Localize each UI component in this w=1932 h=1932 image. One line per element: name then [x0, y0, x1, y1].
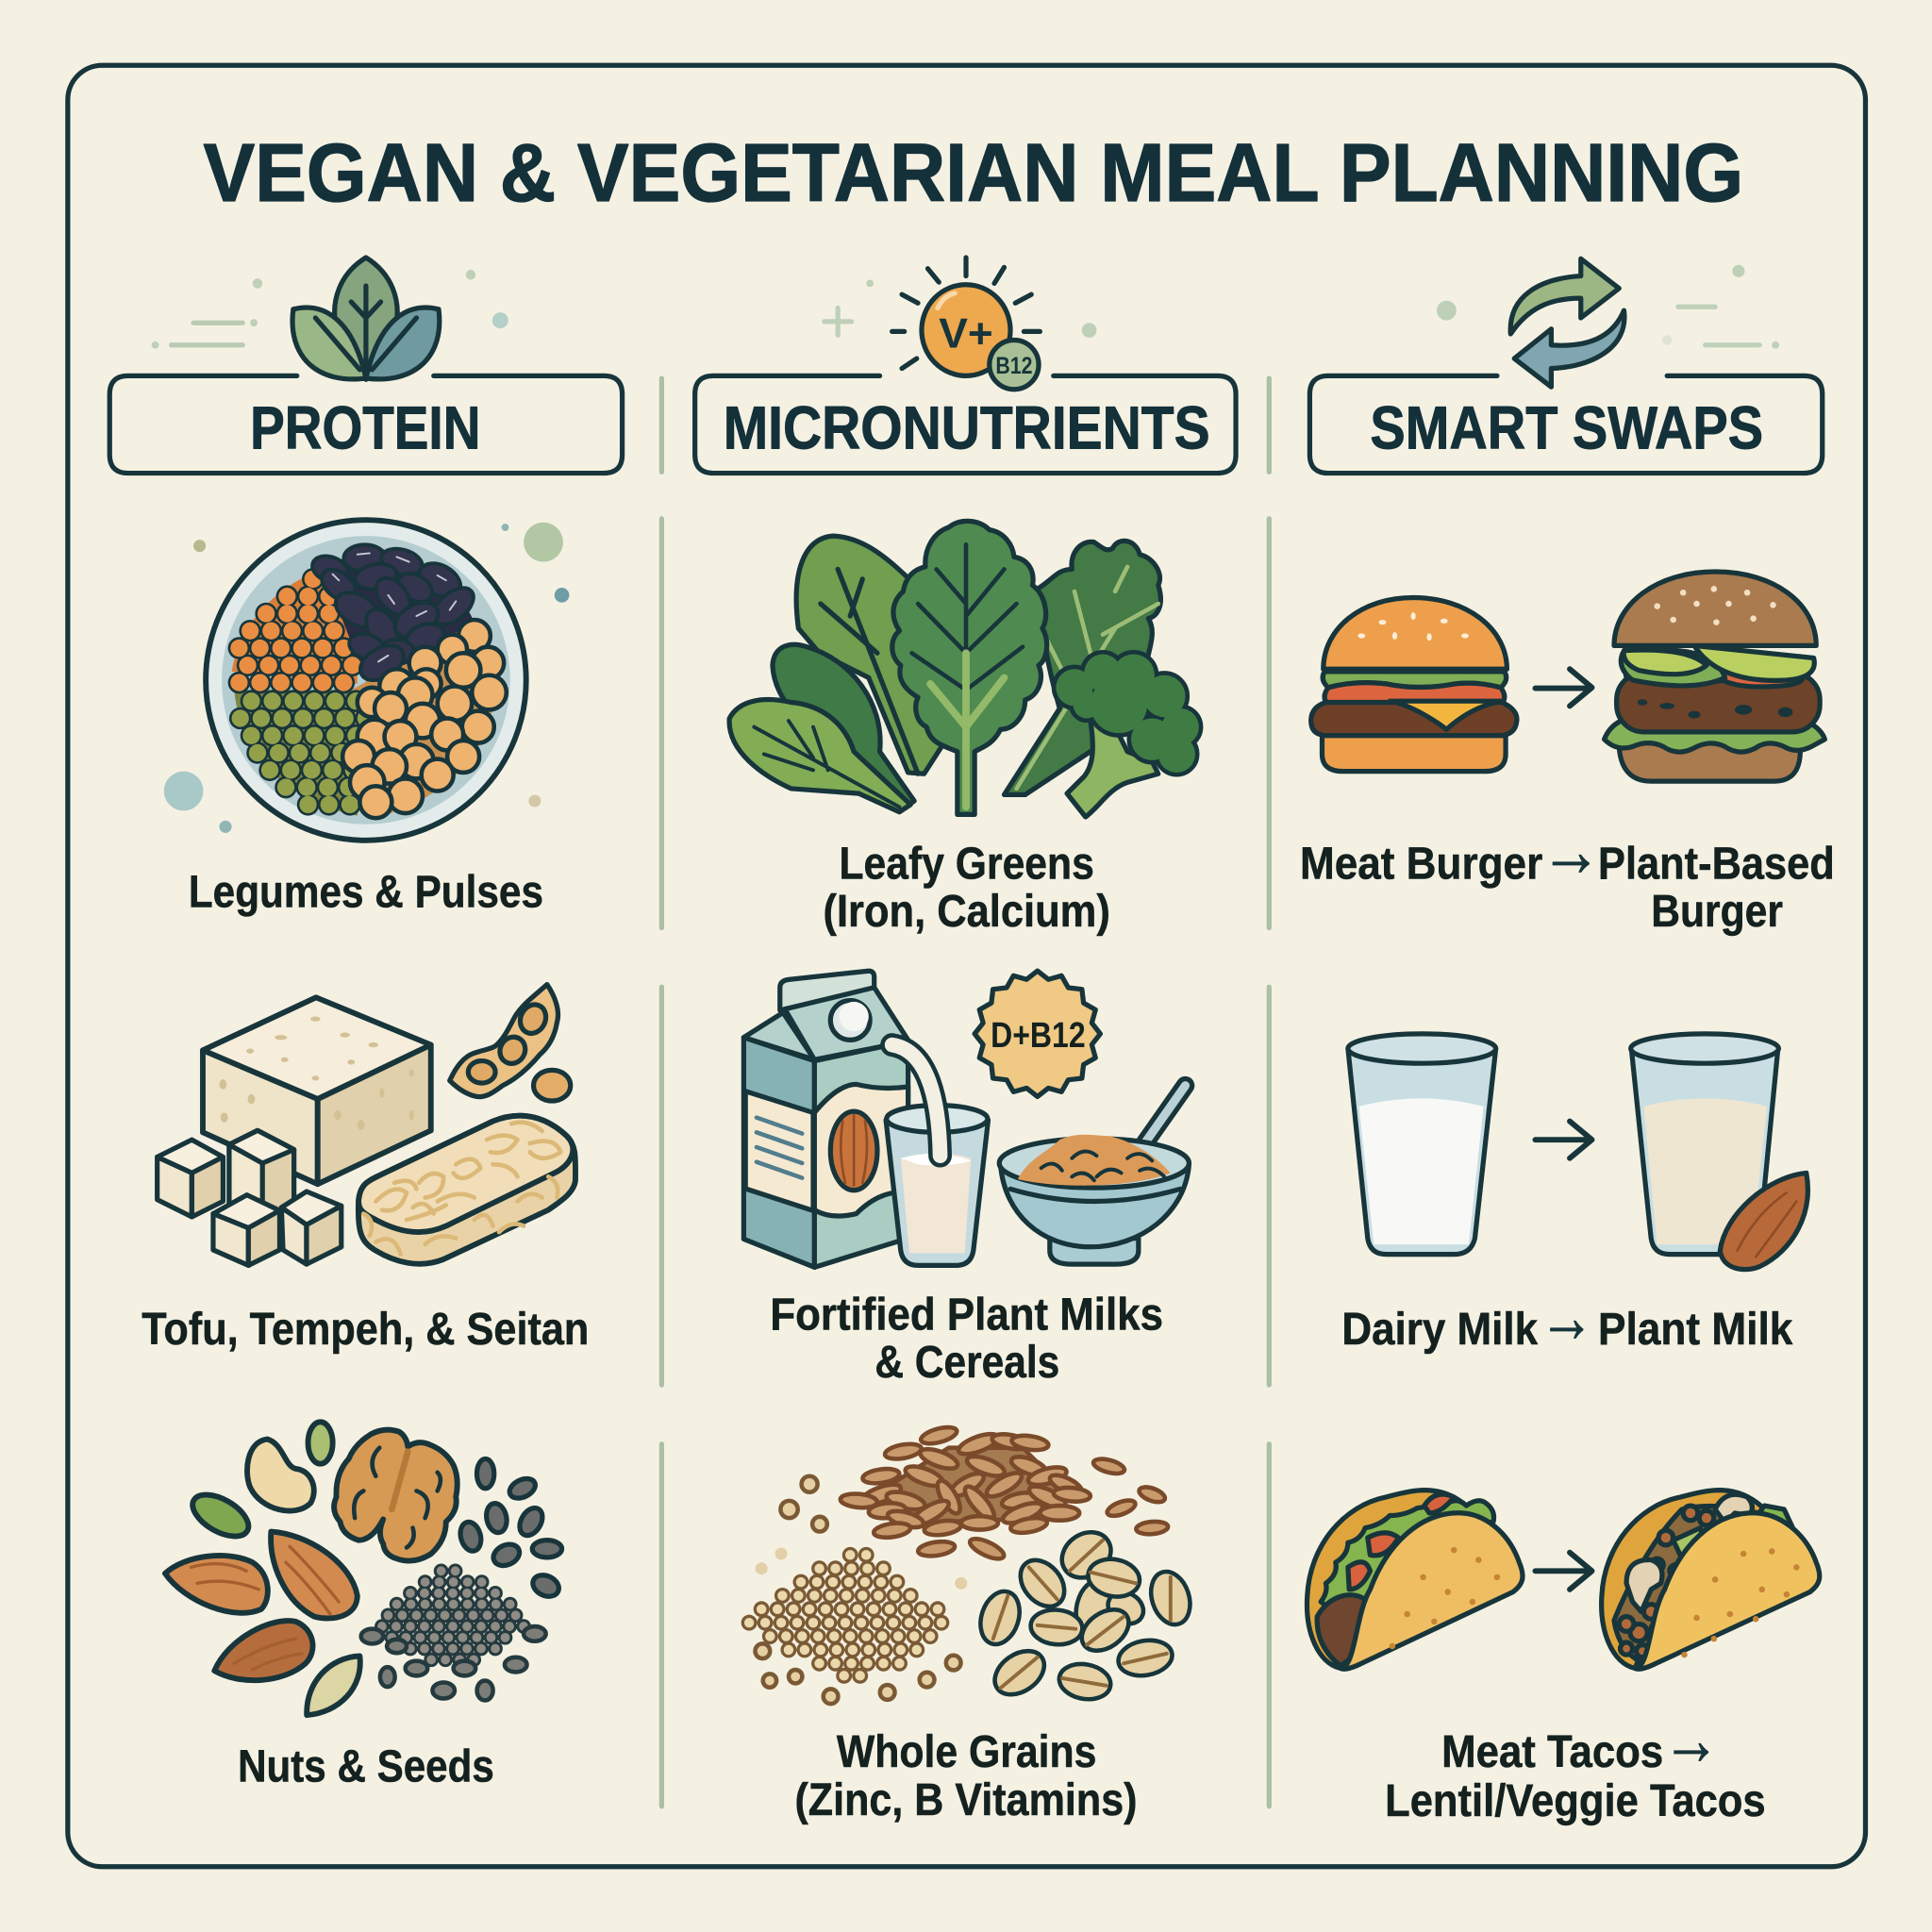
icon: oats — [974, 1523, 1196, 1704]
caption: Meat Tacos — [1441, 1726, 1663, 1777]
caption: Tofu, Tempeh, & Seitan — [142, 1304, 589, 1355]
icon: dark seeds — [458, 1458, 562, 1601]
icon: lentil veggie taco — [1602, 1491, 1820, 1669]
icon: vitamin sun: B12 — [995, 354, 1033, 379]
panel: leafy greens — [729, 521, 1199, 937]
icon: vitamin sun: V+ — [939, 310, 993, 357]
caption — [794, 1726, 1138, 1825]
panel: smart swaps column header: SMART SWAPS — [1370, 393, 1763, 461]
panel: milk swap — [1341, 1034, 1807, 1357]
caption: Dairy Milk — [1341, 1304, 1538, 1355]
icon: quinoa pile — [749, 1476, 967, 1704]
arrow — [1535, 669, 1592, 706]
icon: D+B12 badge: D+B12 — [991, 1016, 1086, 1056]
caption — [823, 838, 1110, 937]
icon: vitamin sun — [892, 258, 1040, 390]
icon: walnut — [334, 1430, 458, 1561]
caption: Fortified Plant Milks — [770, 1289, 1163, 1340]
icon: tempeh slab — [358, 1116, 575, 1264]
caption: → — [1539, 1274, 1594, 1357]
caption: Whole Grains — [837, 1726, 1096, 1777]
caption: → — [1662, 1697, 1720, 1780]
icon: plant-based burger — [1605, 572, 1824, 781]
panel: taco swap — [1307, 1491, 1820, 1826]
icon: plant milk glass — [1631, 1034, 1807, 1270]
icon: dairy milk glass — [1348, 1034, 1496, 1255]
panel: smart swaps column header — [1309, 258, 1823, 474]
caption: Plant-Based — [1598, 838, 1835, 889]
arrow — [1535, 1553, 1592, 1590]
icon: leafy greens and broccoli — [729, 521, 1160, 817]
caption — [1341, 1274, 1793, 1357]
icon: milk carton — [743, 971, 908, 1267]
panel: fortified plant milks and cereals — [743, 971, 1189, 1388]
caption: & Cereals — [874, 1337, 1059, 1388]
caption: (Iron, Calcium) — [823, 886, 1110, 937]
icon: D+B12 badge — [974, 971, 1100, 1096]
panel: tofu, tempeh and seitan — [142, 985, 589, 1355]
arrow — [1535, 1122, 1592, 1158]
caption: Legumes & Pulses — [189, 866, 543, 917]
caption — [770, 1289, 1163, 1388]
panel: micronutrients column header: MICRONUTRIENTS — [724, 393, 1210, 461]
icon: tofu cubes — [158, 1130, 341, 1265]
caption: Plant Milk — [1598, 1304, 1793, 1355]
icon: chia seed pile — [361, 1571, 546, 1700]
panel: protein column header — [109, 258, 623, 474]
panel: burger swap — [1300, 572, 1835, 937]
panel: nuts and seeds — [165, 1422, 562, 1792]
icon: glass of milk — [886, 1106, 989, 1265]
icon: plate of legumes — [206, 520, 526, 841]
icon: leaves — [292, 258, 440, 379]
panel: micronutrients column header — [695, 258, 1236, 474]
icon: soybean pod — [450, 985, 571, 1101]
panel: legumes and pulses — [164, 520, 569, 917]
icon: tofu block — [203, 997, 431, 1184]
icon: cereal bowl — [999, 1086, 1189, 1264]
caption: (Zinc, B Vitamins) — [794, 1774, 1138, 1825]
caption: Nuts & Seeds — [238, 1741, 494, 1792]
caption: → — [1541, 809, 1602, 892]
icon: swap arrows — [1510, 258, 1624, 387]
panel: protein column header: PROTEIN — [250, 393, 480, 461]
icon: meat burger — [1311, 597, 1517, 772]
panel: whole grains — [749, 1424, 1196, 1825]
caption: Meat Burger — [1300, 838, 1542, 889]
caption: Burger — [1651, 886, 1783, 937]
title: VEGAN & VEGETARIAN MEAL PLANNING — [204, 126, 1743, 219]
caption: Leafy Greens — [839, 838, 1094, 889]
caption — [1385, 1697, 1766, 1826]
icon: nuts — [165, 1422, 360, 1715]
caption — [1300, 809, 1835, 937]
caption: Lentil/Veggie Tacos — [1385, 1775, 1766, 1826]
icon: brown rice pile — [840, 1424, 1169, 1563]
icon: meat taco — [1307, 1491, 1523, 1669]
